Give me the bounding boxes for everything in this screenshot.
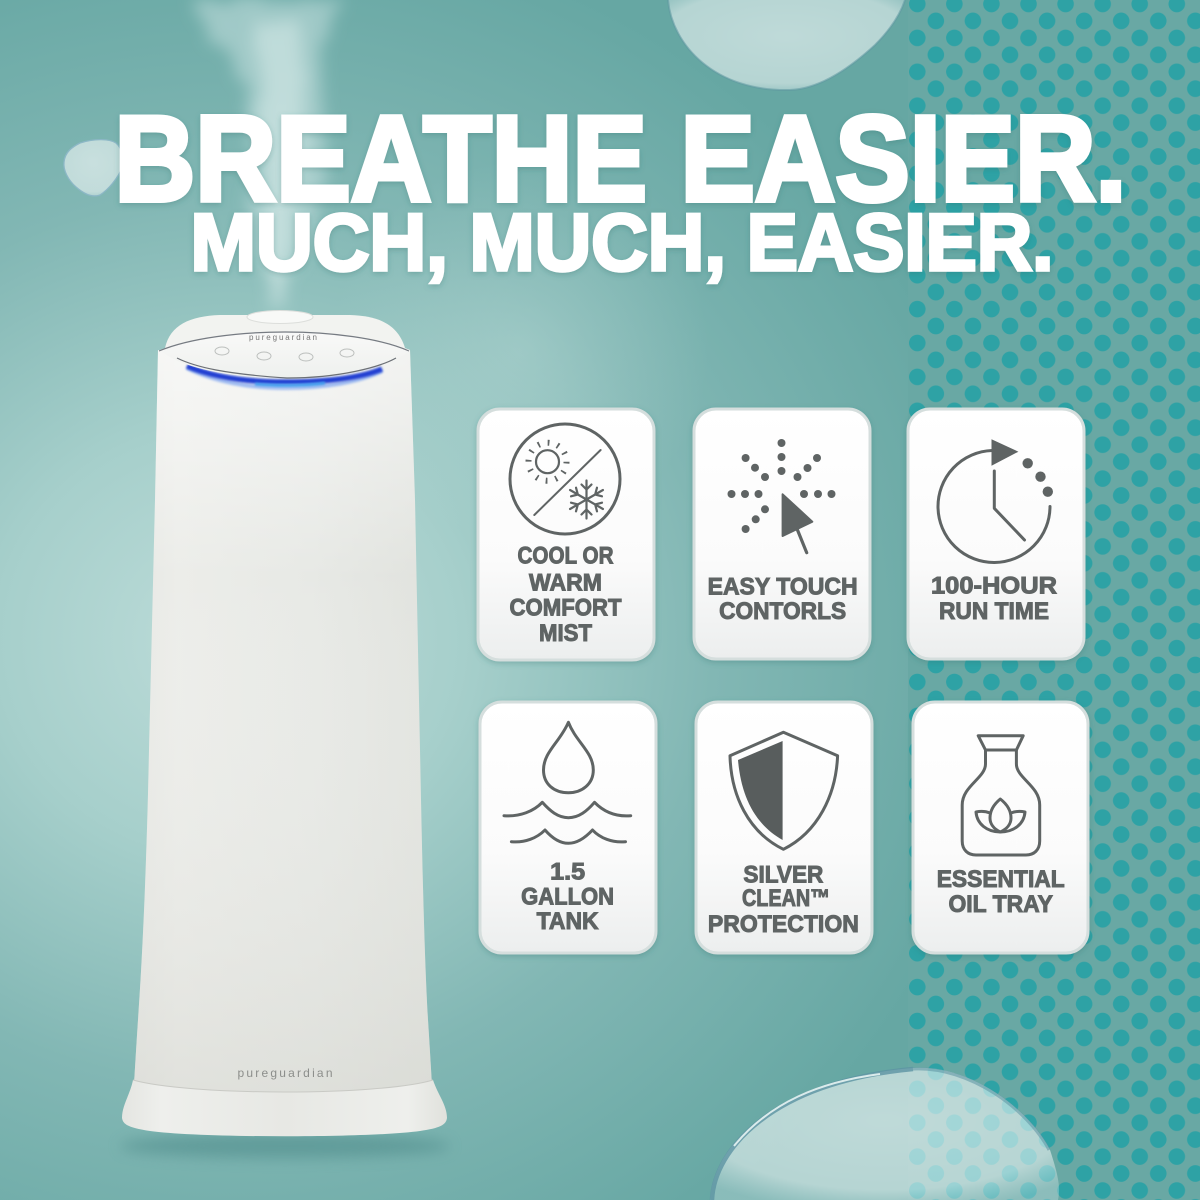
label: 1.5 <box>550 858 585 886</box>
label: WARM <box>529 570 602 596</box>
feature card: cool or warm mist <box>478 409 654 660</box>
label: CONTORLS <box>719 598 846 625</box>
headline line 2: EASIER. <box>747 198 1054 288</box>
humidifier tower <box>120 310 450 1158</box>
title <box>114 90 1126 288</box>
label: ESSENTIAL <box>937 866 1065 893</box>
touch buttons <box>215 347 354 361</box>
icon: sun and snowflake <box>510 424 620 534</box>
label: RUN TIME <box>939 598 1049 625</box>
headline line 1: EASIER. <box>680 90 1126 226</box>
feature card: 100-hour run time <box>908 409 1084 659</box>
label <box>931 572 1057 625</box>
icon: clock <box>938 439 1053 562</box>
label <box>510 542 622 647</box>
label: TANK <box>537 908 599 935</box>
icon: cursor with dots <box>728 439 836 553</box>
label <box>708 862 859 938</box>
label: MIST <box>539 620 592 647</box>
headline line 2 <box>190 198 1054 288</box>
headline line 1 <box>114 90 1126 226</box>
water drop: bottom <box>710 1068 1059 1200</box>
brand logo: panel: pureguardian <box>249 333 317 342</box>
headline line 1: BREATHE <box>114 90 647 226</box>
feature card: essential oil tray <box>913 702 1088 953</box>
headline line 2: MUCH, <box>470 198 726 288</box>
water drop: small left <box>64 140 123 196</box>
control panel disc <box>160 332 410 378</box>
blue light ring <box>187 366 382 388</box>
label: OIL TRAY <box>948 891 1053 918</box>
top lid <box>165 315 405 348</box>
label: CLEAN™ <box>742 885 830 912</box>
label: GALLON <box>521 884 614 910</box>
label <box>708 574 858 625</box>
label <box>521 858 614 935</box>
feature card: 1.5 gallon tank <box>480 702 656 953</box>
label <box>937 866 1065 918</box>
tower base <box>122 1080 447 1136</box>
feature card: silver clean protection <box>696 702 872 953</box>
label: COMFORT <box>510 594 622 622</box>
headline line 2: MUCH, <box>190 198 448 288</box>
brand logo: base: pureguardian <box>238 1066 332 1080</box>
tower shadow <box>120 1134 450 1158</box>
icon: oil bottle with lotus <box>962 736 1040 855</box>
mist outlet <box>247 310 313 324</box>
icon: shield <box>730 732 838 849</box>
label: EASY TOUCH <box>708 574 858 600</box>
label: COOL OR <box>518 542 614 570</box>
icon: water drop and waves <box>504 722 631 843</box>
feature card: easy touch controls <box>694 409 870 659</box>
mist plume <box>190 0 340 312</box>
label: PROTECTION <box>708 911 859 938</box>
water drop: top <box>668 0 905 90</box>
tower body <box>133 350 433 1100</box>
label: SILVER <box>743 862 823 888</box>
label: 100-HOUR <box>931 572 1057 600</box>
